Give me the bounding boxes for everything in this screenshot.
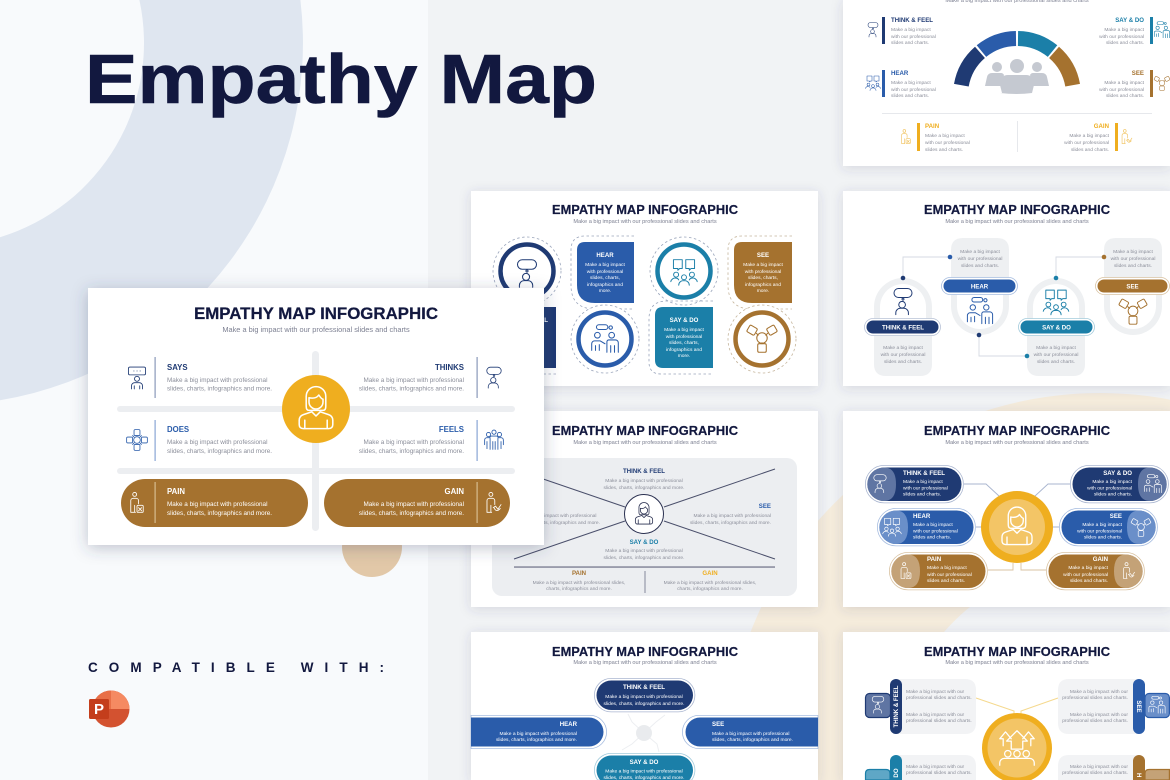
pill gain: slides and charts. (1070, 578, 1108, 584)
text gain: GAIN (702, 570, 718, 577)
icon: people silhouette (985, 59, 1049, 94)
pill see: slides and charts. (1084, 534, 1122, 540)
tab see: Make a big impact with our (1070, 689, 1128, 695)
icon: two people (1149, 696, 1165, 713)
subtitle: Make a big impact with our professional slides and charts (945, 440, 1089, 446)
pill see: SEE (1110, 513, 1122, 520)
tab hear: professional slides and charts. (1062, 770, 1128, 776)
text hear: HEAR (519, 503, 537, 510)
pill pain: with our professional (927, 572, 972, 578)
pill think and feel: slides and charts. (903, 492, 941, 498)
grid bars (117, 351, 515, 531)
stadium hear: Make a big impact (960, 249, 1000, 255)
stadium say and do (1025, 276, 1085, 376)
icon: two people (592, 325, 618, 352)
label pain: with our professional (925, 140, 970, 146)
pill think and feel: with our professional (903, 486, 948, 492)
feels: slides, charts, infographics and more. (359, 448, 464, 455)
decorative crescent blue (0, 0, 303, 400)
panel: stadium flow slide (843, 191, 1170, 386)
label think and feel: THINK & FEEL (891, 17, 933, 24)
tab see: professional slides and charts. (1062, 718, 1128, 724)
circle teal (650, 237, 718, 305)
box see: infographics and (745, 282, 781, 288)
label say and do: with our professional (1099, 34, 1144, 40)
tab think and feel: Make a big impact with our (906, 712, 965, 718)
icon: think (868, 22, 878, 37)
says: SAYS (167, 363, 188, 372)
says: Make a big impact with professional (167, 377, 268, 384)
text gain (664, 570, 756, 592)
pill hear (942, 278, 1018, 294)
does (154, 420, 272, 461)
label see (1099, 70, 1153, 99)
text say and do (603, 539, 685, 561)
pill pain: Make a big impact with professional (167, 501, 268, 508)
pill say and do: SAY & DO (1103, 470, 1132, 477)
connectors (903, 257, 1104, 356)
thinks (359, 357, 478, 398)
icon: two people (967, 298, 993, 324)
panel: main slide (88, 288, 544, 545)
label pain: PAIN (925, 123, 939, 130)
feels: FEELS (439, 425, 464, 434)
pill pain (121, 479, 308, 527)
heading: EMPATHY MAP INFOGRAPHIC (552, 202, 738, 217)
pill think and feel: Make a big impact with professional (605, 694, 683, 700)
pill see: Make a big impact (1082, 522, 1123, 528)
text see: slides, charts, infographics and more. (690, 520, 771, 526)
box hear: more. (599, 288, 611, 294)
pill gain: slides, charts, infographics and more. (359, 510, 464, 517)
pill think and feel: THINK & FEEL (623, 684, 665, 691)
center circle (624, 494, 664, 534)
pill think and feel (865, 465, 963, 503)
text see (690, 503, 771, 526)
pill see: Make a big impact with professional (712, 731, 789, 737)
text think and feel: slides, charts, infographics and more. (603, 485, 685, 491)
icon: PowerPoint logo (89, 690, 130, 728)
feels: Make a big impact with professional (364, 439, 464, 446)
box say and do: Make a big impact (664, 327, 704, 333)
pill say and do (1018, 318, 1094, 336)
box see: slides, charts, (748, 275, 778, 281)
icon: gain (1122, 130, 1132, 144)
pill pain: slides, charts, infographics and more. (167, 510, 272, 517)
tab see (1058, 679, 1169, 734)
heading: EMPATHY MAP INFOGRAPHIC (924, 423, 1110, 438)
says (154, 357, 272, 398)
pill hear: HEAR (560, 721, 578, 728)
tab think and feel: professional slides and charts. (906, 695, 972, 701)
stadium think and feel: with our professional (881, 352, 925, 358)
icon: feels (485, 430, 503, 449)
panel: center pills slide (471, 632, 818, 780)
pill gain: Make a big impact with professional (364, 501, 464, 508)
pill think and feel: THINK & FEEL (882, 324, 924, 331)
stadium think and feel (874, 276, 932, 376)
pill see: with our professional (1077, 528, 1122, 534)
box say and do: with professional (666, 334, 702, 340)
text pain: Make a big impact with professional slides, (533, 580, 625, 586)
icon: pain (902, 130, 910, 144)
label pain: slides and charts. (925, 147, 963, 153)
icon: gain (1123, 563, 1135, 578)
feels (359, 420, 478, 461)
pill see: SEE (1126, 283, 1139, 290)
icon: hub (1119, 299, 1147, 324)
box think and feel: THINK & FEEL (506, 317, 548, 324)
pill hear: Make a big impact (913, 522, 953, 528)
icon: think (872, 696, 884, 713)
subtitle: Make a big impact with our professional slides and charts (573, 660, 717, 666)
pill gain: Make a big impact (1068, 565, 1109, 571)
decorative ring cream (725, 393, 1170, 780)
label gain: with our professional (1064, 140, 1109, 146)
pill pain: Make a big impact (927, 565, 967, 571)
pill say and do: Make a big impact with professional (605, 768, 683, 774)
circle navy (493, 237, 561, 305)
box hear: slides, charts, (590, 275, 620, 281)
icon: think (874, 475, 886, 493)
text think and feel: THINK & FEEL (623, 468, 665, 475)
stadium think and feel: Make a big impact (883, 345, 923, 351)
pill pain: slides and charts. (927, 578, 965, 584)
pill gain: GAIN (444, 487, 464, 496)
icon: says (128, 367, 146, 389)
text say and do: Make a big impact with professional (605, 548, 683, 554)
pill hear (471, 715, 607, 749)
pill gain (1046, 552, 1144, 590)
icon: thinks (487, 367, 501, 388)
box see: with professional (745, 269, 781, 275)
tab see: professional slides and charts. (1062, 695, 1128, 701)
stadium hear: with our professional (958, 256, 1002, 262)
tab think and feel: professional slides and charts. (906, 718, 972, 724)
says: slides, charts, infographics and more. (167, 386, 272, 392)
tab see: Make a big impact with our (1070, 712, 1128, 718)
stadium hear (948, 238, 1009, 337)
heading: EMPATHY MAP INFOGRAPHIC (924, 644, 1110, 659)
pill hear: slides, charts, infographics and more. (496, 737, 577, 743)
heading: EMPATHY MAP INFOGRAPHIC (194, 304, 438, 323)
pill say and do (594, 753, 695, 780)
box say and do (649, 301, 713, 374)
text think and feel: Make a big impact with professional (605, 478, 683, 484)
label think and feel (882, 17, 936, 46)
pill pain: PAIN (927, 556, 941, 563)
pill think and feel (594, 678, 695, 712)
pill think and feel: Make a big impact (903, 479, 943, 485)
icon: pain (131, 492, 143, 512)
box say and do: infographics and (666, 347, 702, 353)
text see: Make a big impact with professional (694, 513, 771, 519)
tab think and feel: Make a big impact with our (906, 689, 965, 695)
thinks: THINKS (435, 363, 464, 372)
center circle (982, 713, 1052, 780)
tab say and do (866, 755, 976, 780)
icon: hub (1131, 518, 1151, 536)
text pain: PAIN (572, 570, 586, 577)
stadium think and feel: slides and charts. (884, 359, 922, 365)
pill see: slides, charts, infographics and more. (712, 737, 793, 743)
center circle (282, 375, 350, 443)
icon: hear (866, 76, 880, 90)
box hear (571, 236, 634, 309)
decorative beige circle (342, 517, 402, 577)
text hear: Make a big impact with professional (519, 513, 596, 519)
panel: semicircle slide (843, 0, 1170, 166)
tab hear (1058, 755, 1169, 780)
panel: vertical tabs slide (843, 632, 1170, 780)
pill say and do: SAY & DO (630, 759, 659, 766)
tab say and do: DO (893, 768, 900, 778)
pill hear: HEAR (971, 283, 989, 290)
icon: group chat (1043, 290, 1069, 315)
pill see (682, 715, 818, 749)
thinks: Make a big impact with professional (364, 377, 464, 384)
tab hear: Make a big impact with our (1070, 764, 1128, 770)
pill pain (889, 552, 987, 590)
label hear: HEAR (891, 70, 909, 77)
tab say and do: professional slides and charts. (906, 770, 972, 776)
icon: gain (487, 492, 501, 512)
pill hear: HEAR (913, 513, 931, 520)
stadium see: with our professional (1111, 256, 1155, 262)
does: DOES (167, 425, 189, 434)
box hear: Make a big impact (585, 262, 625, 268)
cross lines (514, 469, 775, 559)
icon: woman (1002, 507, 1032, 544)
label hear: Make a big impact (891, 80, 931, 86)
tab think and feel (866, 679, 976, 734)
box say and do: more. (678, 353, 690, 359)
label see: SEE (1132, 70, 1144, 77)
icon: PowerPoint logo: P (94, 701, 104, 718)
icon: woman (299, 387, 333, 429)
text think and feel (603, 468, 685, 491)
subtitle: Make a big impact with our professional slides and charts (573, 219, 717, 225)
icon: pain (901, 563, 911, 578)
grey panel (492, 458, 797, 596)
icon: think (894, 288, 912, 315)
subtitle: Make a big impact with our professional slides and charts (222, 325, 410, 334)
pill think and feel: slides, charts, infographics and more. (603, 701, 685, 707)
pill gain: GAIN (1093, 556, 1108, 563)
box see: SEE (757, 252, 769, 259)
box say and do: SAY & DO (670, 317, 699, 324)
circle brown (728, 305, 796, 373)
text say and do: slides, charts, infographics and more. (603, 555, 685, 561)
label think and feel: with our professional (891, 34, 936, 40)
pill say and do: SAY & DO (1042, 324, 1071, 331)
tab see: SEE (1135, 700, 1142, 713)
icon: hub (746, 325, 778, 352)
text gain: charts, infographics and more. (677, 586, 743, 592)
stadium see: Make a big impact (1113, 249, 1153, 255)
stadium say and do: slides and charts. (1037, 359, 1075, 365)
label think and feel: Make a big impact (891, 27, 931, 33)
box say and do: slides, charts, (669, 340, 699, 346)
pill pain: PAIN (167, 487, 185, 496)
icon: does (127, 430, 147, 450)
pill think and feel: THINK & FEEL (903, 470, 945, 477)
box hear: infographics and (587, 282, 623, 288)
icon: think (518, 260, 536, 287)
label gain: slides and charts. (1071, 147, 1109, 153)
box see: Make a big impact (743, 262, 783, 268)
does: Make a big impact with professional (167, 439, 268, 446)
label see: with our professional (1099, 87, 1144, 93)
label gain: Make a big impact (1069, 133, 1110, 139)
text hear: slides, charts, infographics and more. (519, 520, 600, 526)
does: slides, charts, infographics and more. (167, 448, 272, 455)
main title: Empathy Map (85, 40, 597, 118)
compatible with label: COMPATIBLE WITH: (88, 660, 384, 675)
label pain: Make a big impact (925, 133, 965, 139)
pill think and feel (864, 318, 940, 336)
text see: SEE (759, 503, 771, 510)
label see: slides and charts. (1106, 93, 1144, 99)
label say and do: Make a big impact (1104, 27, 1145, 33)
connectors (964, 484, 1070, 527)
label say and do: slides and charts. (1106, 40, 1144, 46)
pill hear (877, 508, 975, 546)
tab say and do: Make a big impact with our (906, 764, 965, 770)
label hear: with our professional (891, 87, 936, 93)
connectors (976, 698, 1058, 714)
label think and feel: slides and charts. (891, 40, 929, 46)
panel: cross map slide (471, 411, 818, 607)
box hear: HEAR (596, 252, 614, 259)
icon: see (1154, 76, 1170, 90)
stadium see: slides and charts. (1114, 263, 1152, 269)
label see: Make a big impact (1104, 80, 1145, 86)
icon: say and do (1154, 22, 1170, 38)
stadium see (1102, 238, 1162, 335)
label hear: slides and charts. (891, 93, 929, 99)
pill gain (324, 479, 510, 527)
text pain: charts, infographics and more. (546, 586, 612, 592)
stadium say and do: with our professional (1034, 352, 1078, 358)
pill say and do: with our professional (1087, 486, 1132, 492)
pill see (1096, 278, 1170, 294)
tab think and feel: THINK & FEEL (893, 685, 900, 727)
label say and do: SAY & DO (1115, 17, 1144, 24)
box think and feel (492, 307, 556, 374)
center node (622, 714, 665, 752)
center circle (981, 491, 1053, 563)
text pain (533, 570, 625, 592)
text hear (519, 503, 600, 526)
label say and do (1099, 17, 1153, 46)
box hear: with professional (587, 269, 623, 275)
label gain: GAIN (1094, 123, 1109, 130)
pill hear: slides and charts. (913, 534, 951, 540)
subtitle: Make a big impact with our professional slides and charts (573, 440, 717, 446)
label gain (1064, 123, 1118, 153)
icon: woman (635, 502, 653, 524)
icon: two people (1144, 475, 1162, 493)
background right tone (428, 0, 1170, 780)
subtitle: Make a big impact with our professional slides and charts (945, 660, 1089, 666)
stadium say and do: Make a big impact (1036, 345, 1076, 351)
pill hear: Make a big impact with professional (500, 731, 577, 737)
icon: chat (883, 518, 901, 536)
text say and do: SAY & DO (630, 539, 659, 546)
pill say and do: slides and charts. (1094, 492, 1132, 498)
thinks: slides, charts, infographics and more. (359, 386, 464, 392)
stadium hear: slides and charts. (961, 263, 999, 269)
pill hear: with our professional (913, 528, 958, 534)
icon: arrows and people (1000, 731, 1034, 765)
semicircle chart (954, 31, 1080, 86)
icon: group chat (671, 260, 697, 285)
label hear (882, 70, 936, 99)
pill gain: with our professional (1063, 572, 1108, 578)
box see (728, 236, 792, 309)
heading: EMPATHY MAP INFOGRAPHIC (552, 423, 738, 438)
pill say and do: Make a big impact (1092, 479, 1133, 485)
tab hear: H (1135, 773, 1142, 777)
circle blue (571, 305, 639, 373)
panel: circles and boxes slide (471, 191, 818, 386)
heading: EMPATHY MAP INFOGRAPHIC (552, 644, 738, 659)
pill say and do (1070, 465, 1168, 503)
box see: more. (757, 288, 769, 294)
pill see: SEE (712, 721, 724, 728)
label pain (917, 123, 970, 153)
panel: hub pills slide (843, 411, 1170, 607)
text gain: Make a big impact with professional slides, (664, 580, 756, 586)
pill see (1059, 508, 1157, 546)
heading: EMPATHY MAP INFOGRAPHIC (924, 202, 1110, 217)
subtitle: Make a big impact with our professional slides and charts (945, 219, 1089, 225)
